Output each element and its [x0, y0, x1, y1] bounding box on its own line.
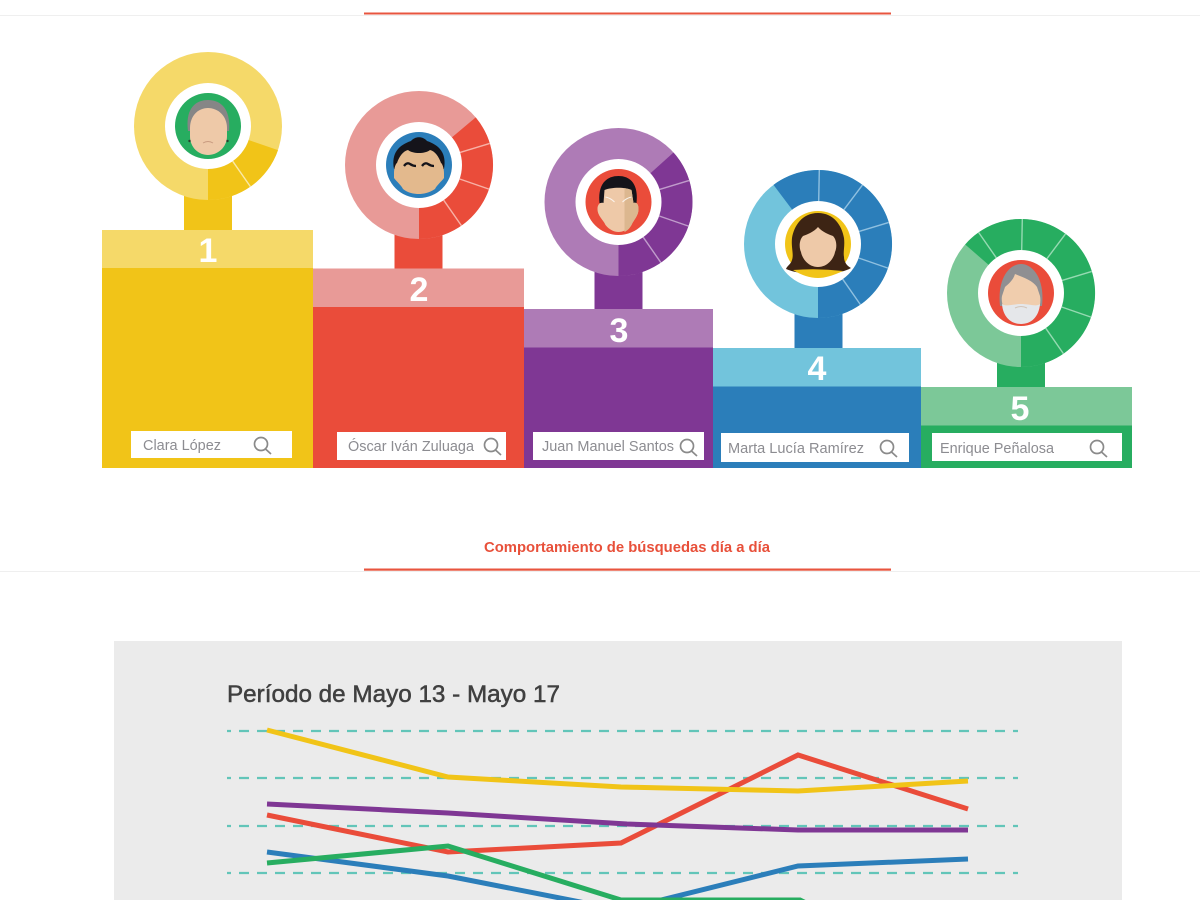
- series: yellow line: [267, 730, 968, 791]
- step body 2: [313, 307, 524, 468]
- chart title: Período de Mayo 13 - Mayo 17: [227, 681, 560, 708]
- panel: line chart: [114, 641, 1122, 900]
- step body 4: [713, 386, 921, 468]
- donut and portrait 3: [544, 128, 692, 276]
- stem 1: [184, 185, 232, 231]
- section heading: Comportamiento de búsquedas día a día: [484, 540, 771, 556]
- search box 2: [337, 432, 506, 460]
- search box 1: Clara López: [143, 437, 221, 454]
- donut and portrait 1: [134, 52, 282, 200]
- podium column 5: Enrique Peñalosa: [921, 219, 1132, 468]
- series: green line: [267, 846, 860, 900]
- donut and portrait 2: [345, 91, 493, 239]
- search box 5: Enrique Peñalosa: [940, 440, 1055, 457]
- rank number 2: 2: [410, 271, 428, 309]
- step header 3: [524, 309, 713, 348]
- donut and portrait 5: [947, 219, 1095, 367]
- step header 4: [713, 348, 921, 386]
- rank number 1: 1: [199, 232, 217, 270]
- stem 4: [794, 305, 842, 349]
- podium column 3: Juan Manuel Santos: [524, 128, 713, 468]
- search box 4: Marta Lucía Ramírez: [728, 440, 864, 457]
- step header 5: [921, 387, 1132, 426]
- series: blue line: [267, 852, 968, 900]
- podium column 4: Marta Lucía Ramírez: [713, 170, 921, 468]
- rank number 3: 3: [610, 312, 628, 350]
- top accent line: [364, 12, 891, 14]
- search box 3: Juan Manuel Santos: [542, 438, 674, 455]
- step header 2: [313, 268, 524, 307]
- search box 2: Óscar Iván Zuluaga: [348, 438, 475, 455]
- step body 3: [524, 348, 713, 468]
- search box 1: [131, 431, 292, 458]
- step body 1: [102, 268, 313, 468]
- search box 4: [721, 433, 909, 462]
- stem 2: [394, 225, 442, 269]
- rank number 4: 4: [808, 350, 827, 388]
- panel background: [114, 641, 1122, 900]
- series: red line: [267, 755, 968, 852]
- section accent line: [364, 568, 891, 571]
- step header 1: [102, 230, 313, 268]
- donut and portrait 4: [744, 170, 892, 318]
- step body 5: [921, 426, 1132, 468]
- rank number 5: 5: [1011, 390, 1029, 428]
- search box 3: [533, 432, 704, 460]
- podium column 2: Óscar Iván Zuluaga: [313, 91, 524, 468]
- podium column 1: Clara López: [102, 52, 313, 468]
- search box 5: [932, 433, 1122, 461]
- stem 5: [997, 354, 1045, 388]
- stem 3: [594, 265, 642, 310]
- series: purple line: [267, 804, 968, 830]
